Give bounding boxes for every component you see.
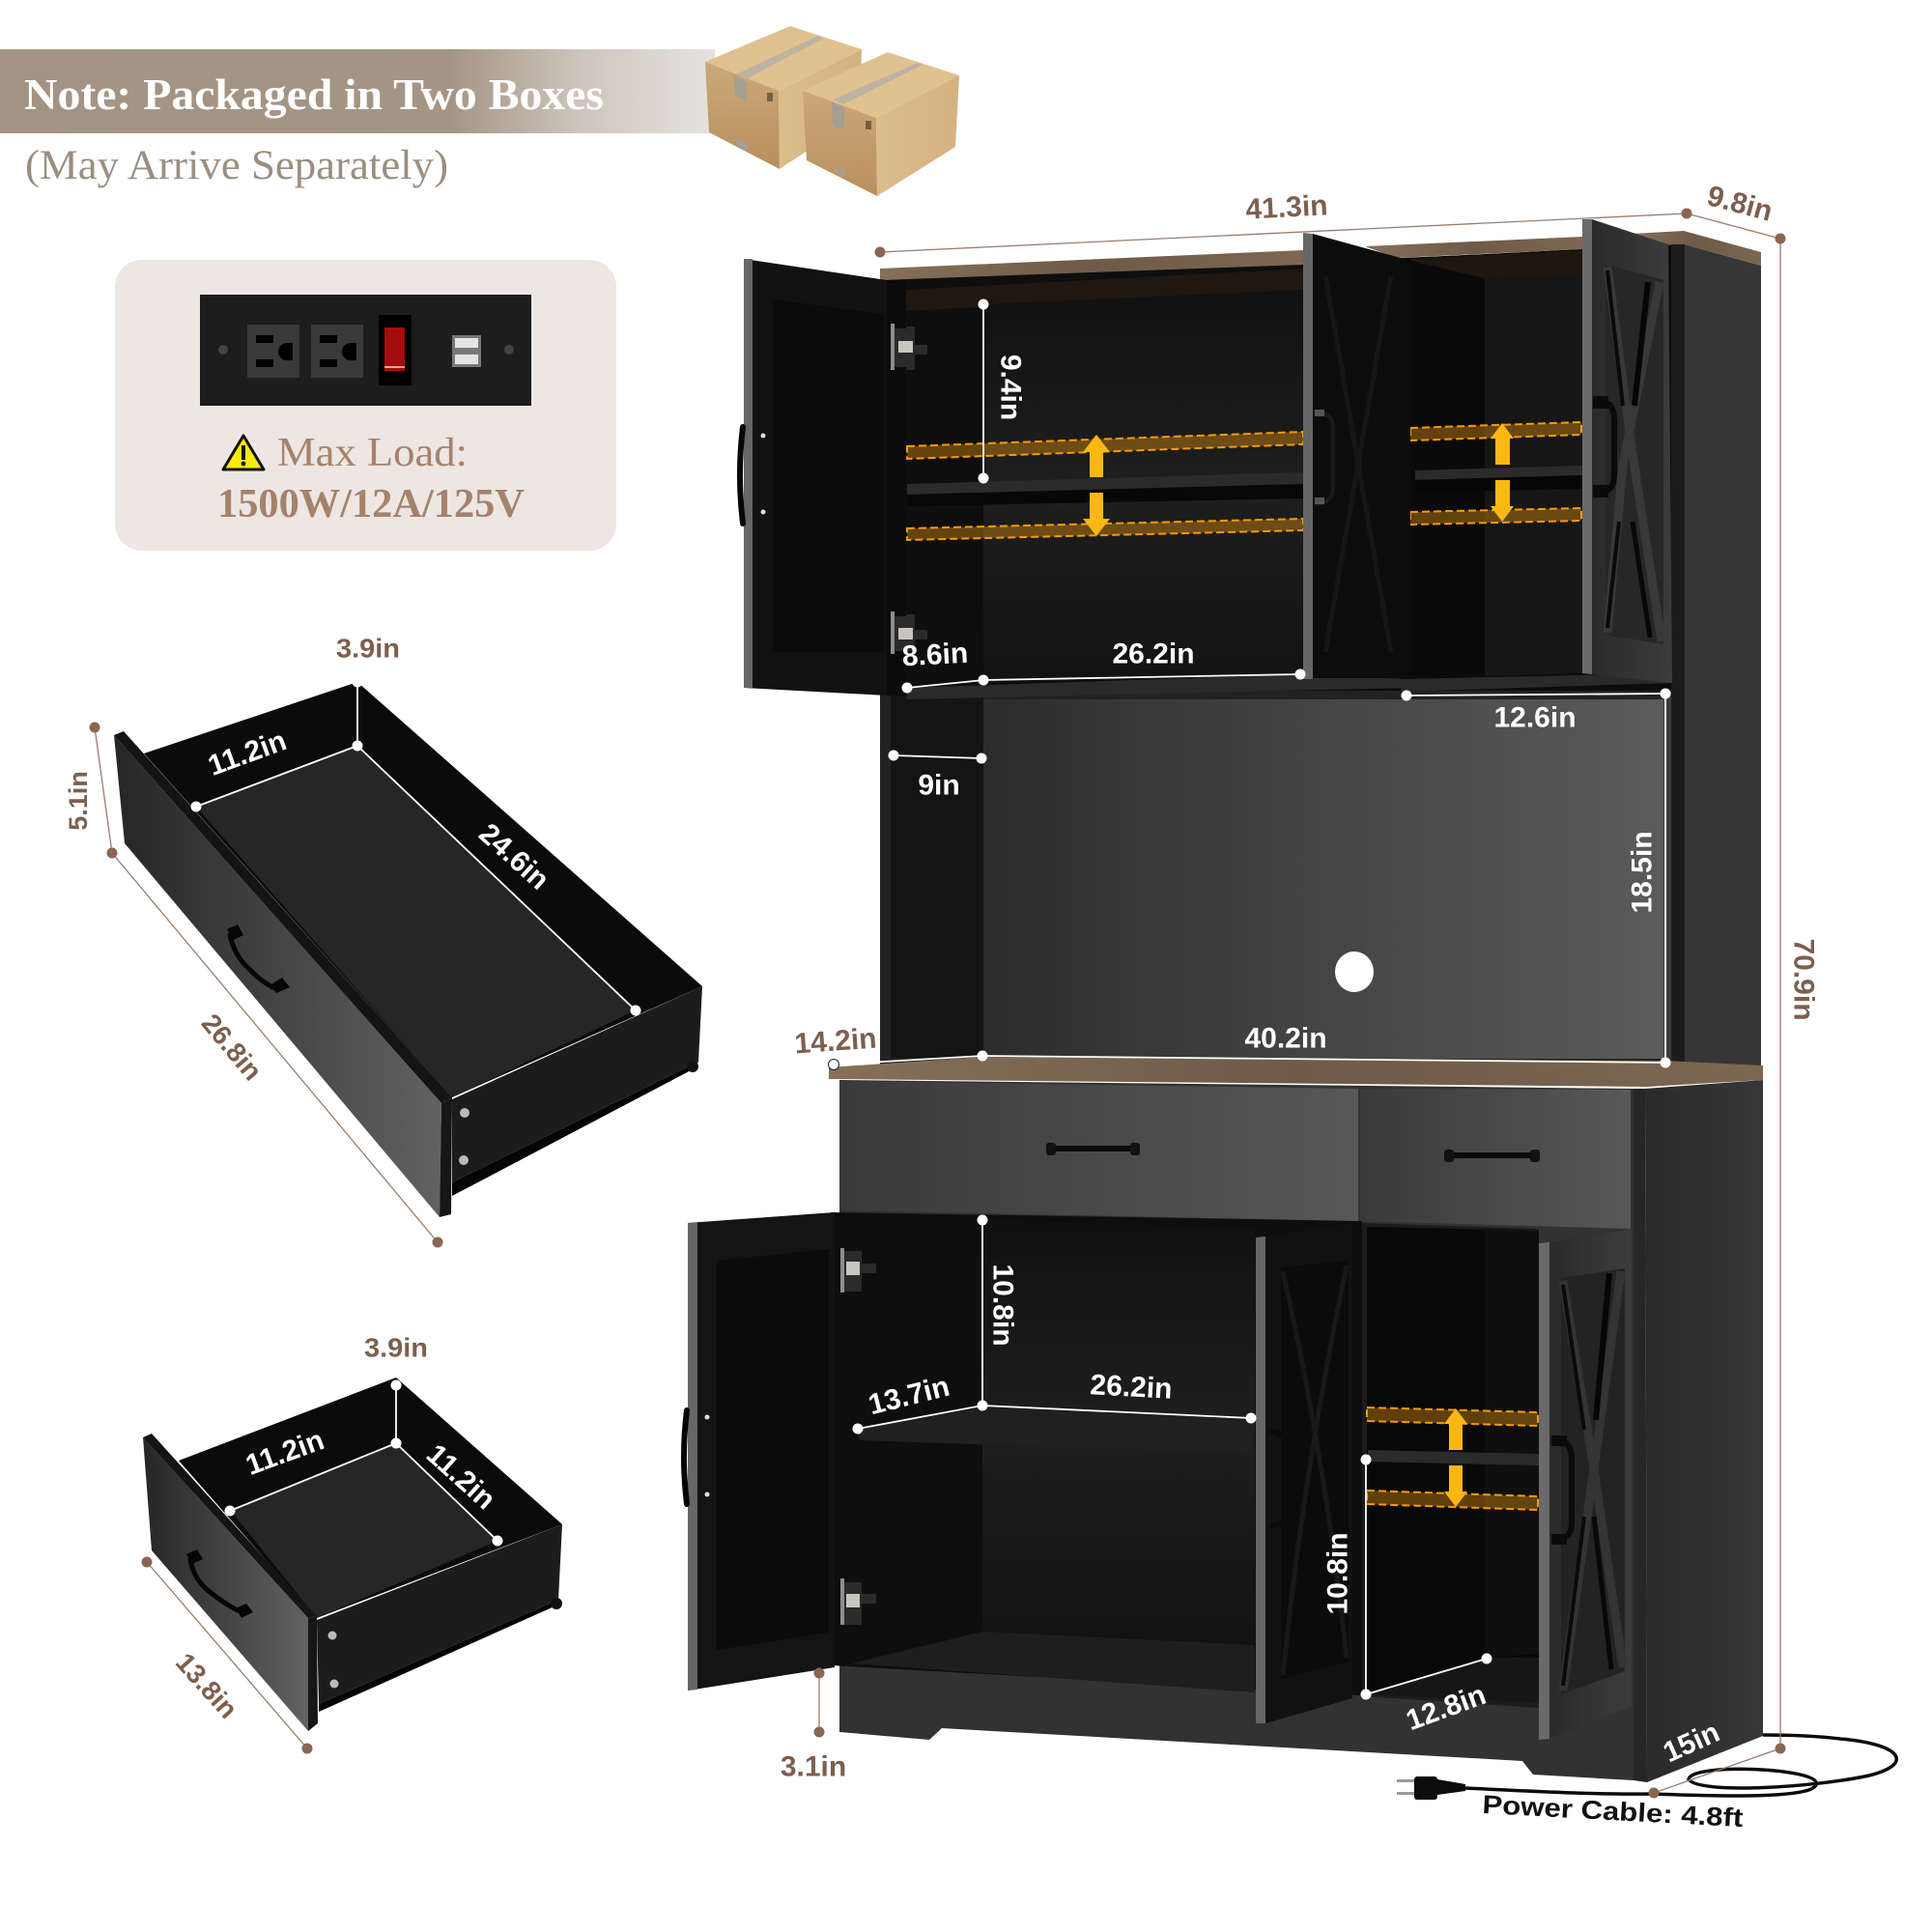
lower shelf arrows — [1444, 1408, 1467, 1507]
dimensions: lower base: 15in — [1659, 1717, 1724, 1769]
cabinet: lower base — [684, 1057, 1763, 1782]
base side panel — [1634, 1080, 1763, 1782]
power cable label: Power Cable: 4.8ft — [1482, 1790, 1744, 1833]
drawer handle — [227, 924, 290, 993]
left compartment — [831, 1212, 1362, 1695]
right compartment — [1362, 1223, 1539, 1708]
dimensions: overall: 14.2in — [793, 1023, 878, 1060]
drawer fronts — [839, 1081, 1631, 1229]
upper right compartment — [1401, 250, 1672, 692]
cabinet: upper hutch — [740, 219, 1761, 1068]
max load label: Max Load: — [277, 431, 468, 475]
dimensions: small drawer: 3.9in — [364, 1333, 428, 1362]
right door — [1582, 219, 1672, 683]
dimensions: small drawer: 11.2in — [420, 1438, 501, 1516]
dimensions: overall — [781, 180, 1820, 1798]
banner: note heading — [0, 49, 715, 133]
dimensions: lower base: 12.8in — [1402, 1679, 1491, 1737]
dimensions: lower base: 10.8in — [987, 1264, 1018, 1347]
dimensions: upper hutch: 26.2in — [1112, 638, 1195, 670]
dimensions: overall: 41.3in — [1245, 189, 1328, 226]
dimensions: large drawer: 26.8in — [196, 1009, 268, 1086]
drawer: large drawer — [64, 634, 702, 1248]
dimensions: lower base: 26.2in — [1090, 1369, 1173, 1406]
panel: power strip and max load — [115, 260, 616, 551]
power strip — [200, 295, 531, 406]
power cable — [1397, 1735, 1896, 1800]
hutch backing — [880, 244, 1674, 699]
dimensions: small drawer: 13.8in — [170, 1647, 243, 1724]
icon: warning triangle — [223, 436, 264, 469]
drawer handles — [1046, 1143, 1540, 1162]
lower hinges — [840, 1248, 876, 1625]
wood top — [880, 231, 1761, 280]
dimensions: large drawer: 11.2in — [204, 724, 291, 782]
hinges — [891, 324, 927, 654]
hutch open bay — [880, 691, 1671, 1067]
banner: note heading: Note: Packaged in Two Boxes — [24, 71, 604, 119]
dimensions: lower base: 13.7in — [866, 1371, 952, 1421]
icon: two cardboard boxes — [705, 26, 959, 196]
dimensions: large drawer — [64, 634, 641, 1248]
dimensions: large drawer: 3.9in — [336, 634, 400, 663]
subtitle: may arrive separately: (May Arrive Separately) — [25, 143, 448, 188]
wood counter — [829, 1057, 1763, 1087]
dimensions: upper hutch: 9in — [918, 769, 960, 802]
dimensions: overall: 3.1in — [781, 1750, 846, 1783]
dimensions: overall: 70.9in — [1787, 938, 1820, 1021]
adjustable shelf arrows — [1083, 423, 1514, 536]
dimensions: large drawer: 24.6in — [472, 817, 555, 896]
small drawer handle — [186, 1549, 253, 1618]
hutch side panel — [1671, 244, 1761, 1068]
dimensions: upper hutch: 40.2in — [1244, 1022, 1327, 1055]
drawer: small drawer — [141, 1333, 562, 1754]
lower left door — [684, 1212, 876, 1690]
lower center door — [1256, 1223, 1352, 1723]
dimensions: small drawer — [141, 1333, 502, 1754]
dimensions: overall: 9.8in — [1704, 180, 1776, 228]
dimensions: upper hutch: 8.6in — [901, 638, 969, 672]
dimensions: upper hutch: 9.4in — [995, 355, 1026, 420]
left door — [740, 259, 927, 696]
dimensions: large drawer: 5.1in — [64, 771, 93, 831]
dimensions: upper hutch: 12.6in — [1493, 701, 1577, 734]
lower right door — [1539, 1229, 1632, 1740]
upper left compartment — [880, 261, 1410, 699]
dimensions: upper hutch: 18.5in — [1627, 831, 1658, 914]
center door — [1303, 233, 1410, 679]
power rating: 1500W/12A/125V — [217, 482, 525, 526]
dimensions: lower base — [852, 1215, 1724, 1769]
dimensions: upper hutch — [889, 299, 1671, 1068]
base front — [839, 1080, 1634, 1780]
dimensions: lower base: 10.8in — [1321, 1532, 1354, 1615]
dimensions: small drawer: 11.2in — [242, 1424, 328, 1482]
